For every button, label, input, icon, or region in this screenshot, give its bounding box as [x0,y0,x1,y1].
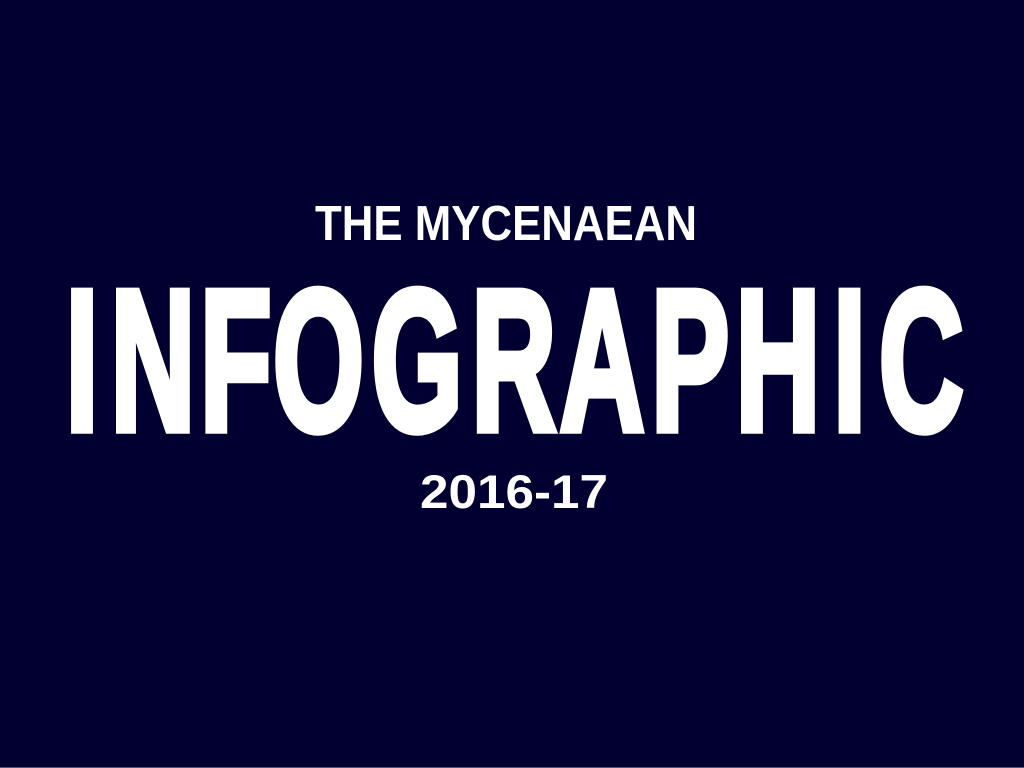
year: 2016-17: 2016-17 [420,465,608,518]
main title: Infographic: INFOGRAPHIC [66,249,964,472]
heading: The Mycenaean: THE MYCENAEAN [315,197,697,251]
